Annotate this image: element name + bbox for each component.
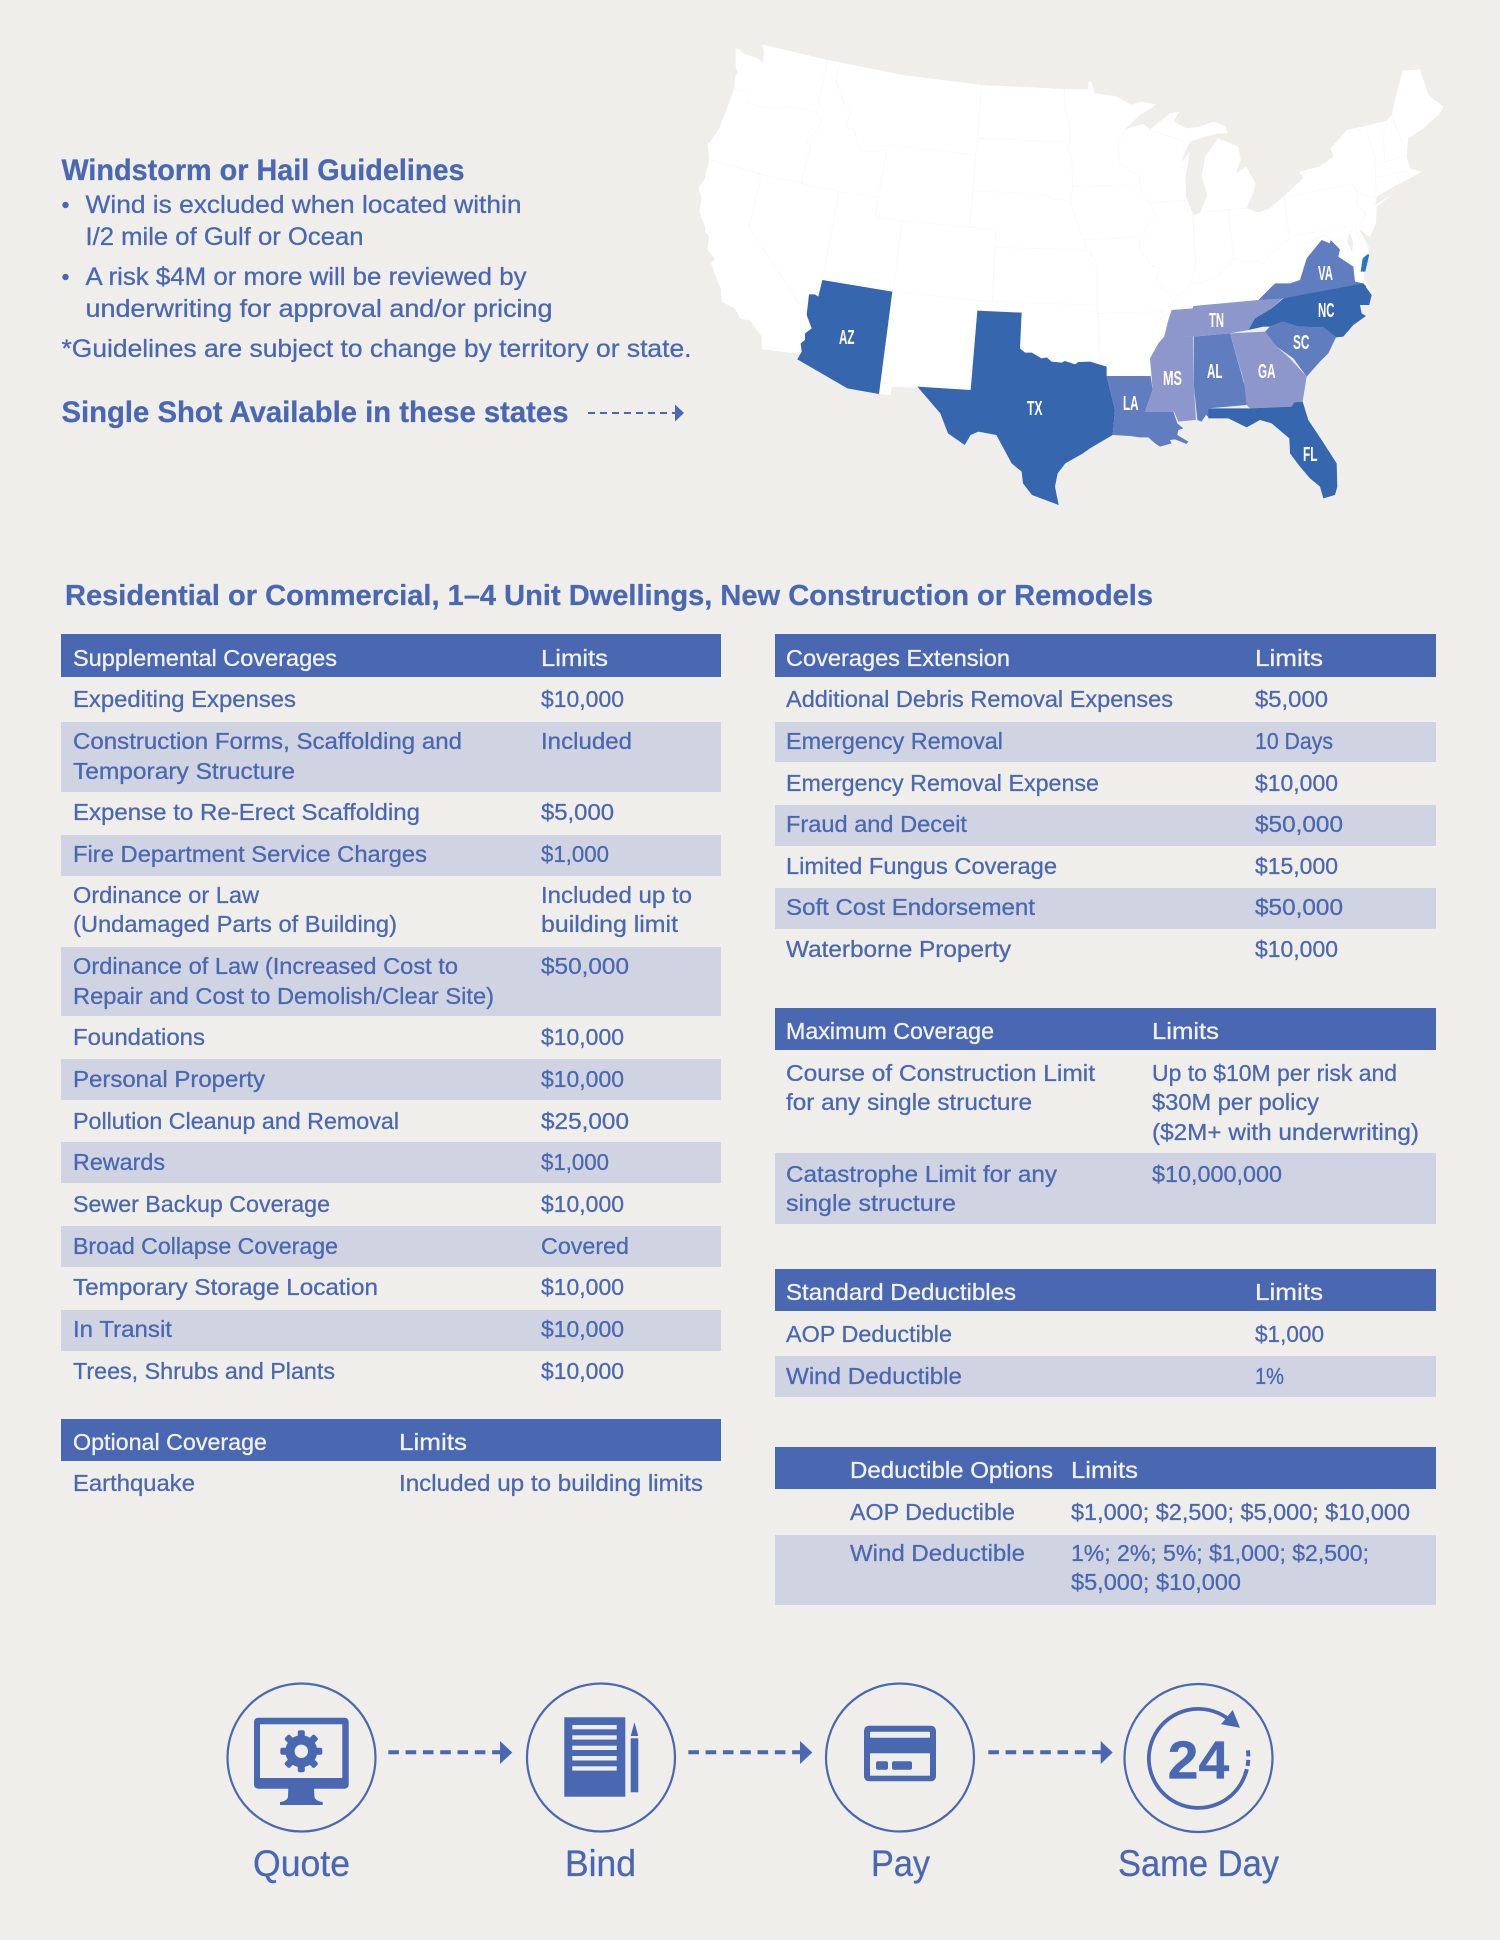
table: supplemental coverages: Construction Forms, Scaffolding and [73, 728, 462, 754]
table: supplemental coverages: Personal Property [73, 1066, 265, 1092]
map state: North Carolina [1248, 283, 1372, 337]
bullet: wind exclusion: Wind is excluded when located within [86, 191, 522, 219]
map state labels: VA [1318, 262, 1333, 285]
heading: residential or commercial: Residential or Commercial, 1–4 Unit Dwellings, New Construction or Remodels [65, 580, 1153, 612]
table: deductible options [775, 1447, 1436, 1605]
table: standard deductibles: $1,000 [1255, 1321, 1324, 1347]
table header: Limits [1071, 1457, 1138, 1483]
table header: Coverages Extension [786, 645, 1010, 671]
table: standard deductibles: Wind Deductible [786, 1363, 962, 1389]
table: coverages extension: Additional Debris Removal Expenses [786, 686, 1173, 712]
table: supplemental coverages: Ordinance of Law (Increased Cost to [73, 953, 458, 979]
table: supplemental coverages: $10,000 [541, 1358, 624, 1384]
table: coverages extension: $15,000 [1255, 853, 1338, 879]
heading: guidelines: Windstorm or Hail Guidelines [62, 154, 464, 187]
table: maximum coverage: for any single structure [786, 1089, 1032, 1115]
table header: Limits [1255, 1279, 1323, 1305]
map state labels: AL [1207, 360, 1222, 383]
table: supplemental coverages: Broad Collapse Coverage [73, 1233, 338, 1259]
table: maximum coverage: Course of Construction Limit [786, 1060, 1095, 1086]
table: coverages extension: Waterborne Property [786, 936, 1011, 962]
table: coverages extension: $5,000 [1255, 686, 1328, 712]
table header [775, 1008, 1436, 1050]
step: same day [1118, 1684, 1279, 1884]
table: coverages extension: $50,000 [1255, 811, 1343, 837]
table: supplemental coverages: $1,000 [541, 841, 609, 867]
table: supplemental coverages: $10,000 [541, 1191, 624, 1217]
table header [61, 634, 721, 677]
text block: windstorm or hail guidelines [62, 154, 692, 429]
table: maximum coverage: ($2M+ with underwriting) [1152, 1119, 1419, 1145]
table: supplemental coverages: $25,000 [541, 1108, 629, 1134]
table: supplemental coverages: Expense to Re-Erect Scaffolding [73, 799, 420, 825]
table: supplemental coverages: Included [541, 728, 632, 754]
map state: Louisiana [1107, 376, 1188, 447]
map state: Mississippi [1145, 337, 1196, 422]
label: quote: Quote [253, 1843, 350, 1884]
map: Chesapeake and Delaware bays [1347, 228, 1370, 252]
map state: Georgia [1230, 332, 1307, 408]
table: maximum coverage: $30M per policy [1152, 1089, 1319, 1115]
table: coverages extension: $10,000 [1255, 770, 1338, 796]
map state: Florida [1208, 402, 1337, 498]
arrow: pay to same day [988, 1741, 1113, 1764]
table: supplemental coverages: $50,000 [541, 953, 629, 979]
table: standard deductibles: 1% [1255, 1363, 1284, 1389]
table: supplemental coverages [61, 634, 721, 1384]
table header: Limits [399, 1429, 467, 1455]
map state labels: MS [1163, 367, 1182, 390]
table: deductible options: Wind Deductible [850, 1540, 1025, 1566]
table: supplemental coverages: $10,000 [541, 686, 624, 712]
table: coverages extension: $10,000 [1255, 936, 1338, 962]
arrow: quote to bind [388, 1741, 512, 1764]
map state labels: TX [1027, 397, 1043, 420]
map state: Texas [917, 311, 1115, 505]
table: supplemental coverages: $5,000 [541, 799, 614, 825]
table header: Supplemental Coverages [73, 645, 337, 671]
icon: monitor with gear [254, 1718, 349, 1805]
arrow: towards map [588, 404, 684, 422]
table: deductible options: 1%; 2%; 5%; $1,000; $2,500; [1071, 1540, 1369, 1566]
map state labels: GA [1258, 360, 1276, 383]
table: supplemental coverages: (Undamaged Parts of Building) [73, 911, 397, 937]
table: supplemental coverages: Expediting Expenses [73, 686, 296, 712]
map state: Tennessee [1164, 298, 1283, 337]
table: coverages extension [775, 634, 1436, 962]
table: supplemental coverages: Sewer Backup Coverage [73, 1191, 330, 1217]
table: supplemental coverages: Included up to [541, 882, 692, 908]
map state labels: LA [1123, 392, 1139, 415]
map state: Alabama [1194, 333, 1247, 422]
table: supplemental coverages: $10,000 [541, 1316, 624, 1342]
table: coverages extension: Emergency Removal Expense [786, 770, 1099, 796]
table: supplemental coverages: $10,000 [541, 1066, 624, 1092]
table: maximum coverage: Catastrophe Limit for any [786, 1161, 1057, 1187]
table: supplemental coverages: Repair and Cost to Demolish/Clear Site) [73, 983, 494, 1009]
table header [61, 1419, 721, 1461]
table: supplemental coverages: $10,000 [541, 1024, 624, 1050]
bullet: risk review [62, 263, 553, 323]
step: bind [527, 1684, 675, 1884]
arrow: bind to pay [688, 1741, 812, 1764]
map: white US silhouette [698, 44, 1443, 395]
bullet: risk review: underwriting for approval and/or pricing [86, 295, 552, 323]
table header: Limits [1255, 645, 1323, 671]
map state labels: SC [1293, 331, 1310, 354]
table: deductible options: $5,000; $10,000 [1071, 1569, 1241, 1595]
map state: South Carolina [1265, 322, 1336, 377]
table: coverages extension: Emergency Removal [786, 728, 1003, 754]
map: US states with Single Shot availability [698, 44, 1443, 505]
map state labels: TN [1209, 309, 1224, 332]
table: standard deductibles [775, 1269, 1436, 1397]
table: supplemental coverages: Fire Department Service Charges [73, 841, 427, 867]
bullet: risk review: A risk $4M or more will be reviewed by [86, 263, 527, 291]
table: maximum coverage [775, 1008, 1436, 1224]
table: supplemental coverages: $1,000 [541, 1149, 609, 1175]
bullet: wind exclusion: I/2 mile of Gulf or Ocean [86, 223, 364, 251]
table: supplemental coverages: building limit [541, 911, 678, 937]
step: quote [228, 1684, 376, 1884]
table: coverages extension: Fraud and Deceit [786, 811, 967, 837]
table: maximum coverage: single structure [786, 1190, 956, 1216]
map state labels [839, 262, 1335, 466]
map state labels: AZ [839, 326, 854, 349]
table header [775, 1269, 1436, 1311]
table: coverages extension: 10 Days [1255, 728, 1333, 754]
table: supplemental coverages: $10,000 [541, 1274, 624, 1300]
table: coverages extension: Limited Fungus Coverage [786, 853, 1057, 879]
map state labels: FL [1303, 443, 1318, 466]
label: pay: Pay [871, 1843, 930, 1884]
table: supplemental coverages: Covered [541, 1233, 629, 1259]
icon: payment card [864, 1726, 936, 1781]
map state: Arizona [797, 280, 892, 394]
table: coverages extension: Soft Cost Endorsement [786, 894, 1035, 920]
table: supplemental coverages: Rewards [73, 1149, 165, 1175]
table header: Deductible Options [850, 1457, 1053, 1483]
table: maximum coverage: Up to $10M per risk and [1152, 1060, 1397, 1086]
table: coverages extension: $50,000 [1255, 894, 1343, 920]
icon: 24 hour clock: 24 [1168, 1730, 1229, 1790]
table: deductible options: AOP Deductible [850, 1499, 1015, 1525]
table: supplemental coverages: Temporary Structure [73, 758, 295, 784]
table: supplemental coverages: Ordinance or Law [73, 882, 260, 908]
table header: Limits [1152, 1018, 1219, 1044]
step: pay [826, 1684, 974, 1884]
table: deductible options: $1,000; $2,500; $5,000; $10,000 [1071, 1499, 1410, 1525]
bullet: wind exclusion [62, 191, 522, 251]
table header [775, 1447, 1436, 1489]
table: supplemental coverages: Foundations [73, 1024, 205, 1050]
table: optional coverage: Earthquake [73, 1470, 195, 1496]
label: same day: Same Day [1118, 1843, 1279, 1884]
icon: 24 hour clock [1149, 1709, 1248, 1808]
table: optional coverage [61, 1419, 721, 1496]
table: supplemental coverages: In Transit [73, 1316, 172, 1342]
table: supplemental coverages: Temporary Storage Location [73, 1274, 378, 1300]
icon: document and pen [564, 1717, 638, 1797]
table header: Maximum Coverage [786, 1018, 994, 1044]
table header [775, 634, 1436, 677]
map state: Virginia [1258, 240, 1367, 300]
label: bind: Bind [565, 1843, 636, 1884]
table header: Limits [541, 645, 608, 671]
table: maximum coverage: $10,000,000 [1152, 1161, 1282, 1187]
map state labels: NC [1318, 299, 1335, 322]
callout: single shot: Single Shot Available in these states [62, 396, 568, 429]
note: guidelines subject to change: *Guidelines are subject to change by territory or state. [62, 335, 692, 363]
table: standard deductibles: AOP Deductible [786, 1321, 952, 1347]
table header: Optional Coverage [73, 1429, 267, 1455]
map state: Delaware sliver [1361, 254, 1369, 272]
table header: Standard Deductibles [786, 1279, 1016, 1305]
table: optional coverage: Included up to building limits [399, 1470, 703, 1496]
table: supplemental coverages: Pollution Cleanup and Removal [73, 1108, 399, 1134]
table: supplemental coverages: Trees, Shrubs and Plants [73, 1358, 335, 1384]
